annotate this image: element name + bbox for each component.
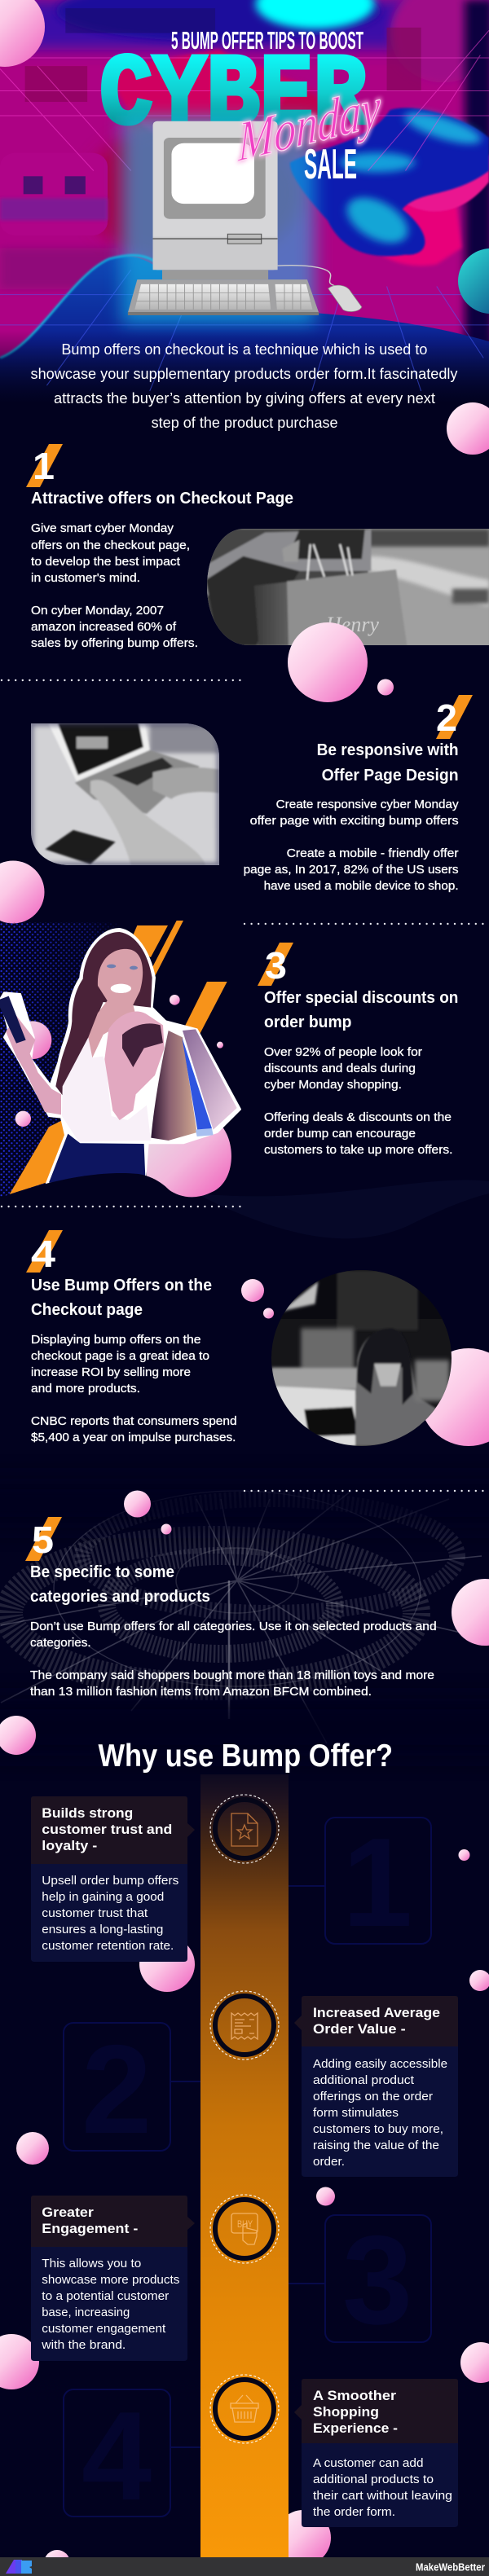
ghost number 2 xyxy=(64,2019,200,2160)
number badge 1 xyxy=(26,444,63,487)
raised arm xyxy=(104,1011,165,1120)
number badge 3: 3 xyxy=(265,944,287,987)
timeline icon 3: buy button: BUY xyxy=(237,2218,253,2230)
heading 3 xyxy=(264,989,458,1031)
body text 4: CNBC reports that consumers spend xyxy=(31,1415,237,1428)
body text 2: Create a mobile - friendly offer xyxy=(287,847,459,860)
card 3 header xyxy=(31,2196,187,2247)
body text 1: in customer's mind. xyxy=(31,572,140,585)
card 3: greater engagement: customer engagement xyxy=(42,2323,165,2336)
card 4: a smoother shopping experience: additional products to xyxy=(313,2473,434,2486)
skirt xyxy=(49,1134,145,1183)
card 3: greater engagement: with the brand. xyxy=(41,2339,126,2352)
card 1: builds strong customer trust and loyalty: help in gaining a good xyxy=(42,1891,164,1904)
body text 1: sales by offering bump offers. xyxy=(31,637,198,650)
card 4: a smoother shopping experience: A Smoother xyxy=(313,2388,396,2403)
card 1: builds strong customer trust and loyalty: ensures a long-lasting xyxy=(42,1923,163,1936)
heading 4 xyxy=(31,1277,212,1319)
body text 5 xyxy=(30,1620,437,1699)
card 3: greater engagement: to a potential customer xyxy=(42,2290,169,2303)
number badge 5: 5 xyxy=(32,1519,54,1561)
intro paragraph: Bump offers on checkout is a technique which is used to xyxy=(61,341,427,358)
card 2 body xyxy=(302,2046,458,2177)
body text 3: cyber Monday shopping. xyxy=(264,1079,402,1092)
body text 4: checkout page is a great idea to xyxy=(31,1350,209,1363)
hair xyxy=(55,932,152,1097)
body text 3: discounts and deals during xyxy=(264,1062,416,1075)
card 2: increased average order value: Adding easily accessible xyxy=(313,2058,447,2071)
dartboard background xyxy=(0,1479,489,1756)
body text 3: customers to take up more offers. xyxy=(264,1144,453,1157)
heading 2: Offer Page Design xyxy=(322,767,459,785)
bottom wave mask xyxy=(0,1173,175,1202)
card 4 body xyxy=(302,2443,458,2527)
intro paragraph: attracts the buyer’s attention by giving offers at every next xyxy=(54,389,435,407)
body text 4 xyxy=(31,1334,237,1444)
hero background xyxy=(0,0,489,433)
card 3: greater engagement: Greater xyxy=(42,2205,94,2220)
section 5: be specific to some categories and products xyxy=(0,1491,489,1755)
heading 1: Attractive offers on Checkout Page xyxy=(31,490,293,508)
computer illustration xyxy=(121,116,362,325)
body text 4: increase ROI by selling more xyxy=(31,1366,191,1379)
body text 4: $5,400 a year on impulse purchases. xyxy=(31,1431,236,1444)
heading 4: Checkout page xyxy=(31,1301,143,1319)
section 1: attractive offers on checkout page xyxy=(26,444,489,702)
card 3 body xyxy=(31,2247,187,2361)
computer screen xyxy=(164,138,266,219)
card 1 header xyxy=(31,1796,187,1864)
card 1: builds strong customer trust and loyalty: customer trust and xyxy=(42,1822,172,1837)
body text 1 xyxy=(31,522,198,650)
photo: shopping bags xyxy=(206,529,489,645)
card 4: a smoother shopping experience: the order form. xyxy=(313,2506,395,2519)
decorative circles xyxy=(288,622,368,702)
number badge 4 xyxy=(26,1230,63,1275)
orange stripes xyxy=(128,925,168,957)
card 1: builds strong customer trust and loyalty: customer retention rate. xyxy=(42,1940,174,1953)
section 3: offer special discounts on order bump xyxy=(258,943,458,1157)
heading 2 xyxy=(317,741,459,785)
ghost number 3 xyxy=(289,2209,431,2350)
body text 3: order bump can encourage xyxy=(264,1128,416,1141)
intro paragraph: showcase your supplementary products order form.It fascinatedly xyxy=(31,365,458,382)
body text 3: Over 92% of people look for xyxy=(264,1046,422,1059)
decorative circles in hero xyxy=(0,0,489,455)
card 2: increased average order value: Increased Average xyxy=(313,2005,440,2020)
ghost number 4 xyxy=(64,2385,200,2526)
card 2: increased average order value: offerings on the order xyxy=(313,2090,433,2103)
card 1: builds strong customer trust and loyalty: customer trust that xyxy=(42,1907,148,1920)
photo: shopping bags: Henry xyxy=(325,613,379,636)
section 2: be responsive with offer page design xyxy=(0,695,473,924)
card 3: greater engagement: This allows you to xyxy=(42,2257,141,2270)
card 3: greater engagement: showcase more products xyxy=(42,2274,179,2287)
hero word: CYBER: CYBER xyxy=(99,40,368,154)
card 1: builds strong customer trust and loyalty xyxy=(31,1796,195,1962)
computer body xyxy=(153,121,278,270)
card 2: increased average order value: customers to buy more, xyxy=(313,2123,443,2136)
card 1: builds strong customer trust and loyalty: Builds strong xyxy=(42,1805,133,1821)
number badge 4: 4 xyxy=(31,1233,55,1275)
body text 5: Don’t use Bump offers for all categories. Use it on selected products and xyxy=(30,1620,437,1633)
decorative circles xyxy=(124,1491,151,1517)
body text 3 xyxy=(264,1046,453,1157)
hero word: Monday: Monday xyxy=(237,74,381,174)
footer bar xyxy=(0,2557,489,2576)
heading: why use bump offer: Why use Bump Offer? xyxy=(98,1739,393,1774)
body text 1: to develop the best impact xyxy=(31,556,180,569)
card 2: increased average order value: order. xyxy=(313,2156,345,2169)
ghost number 1 xyxy=(289,1812,431,1953)
arm with phone xyxy=(6,1016,61,1114)
card 3: greater engagement: Engagement - xyxy=(42,2221,138,2236)
number badge 5 xyxy=(25,1517,62,1561)
body text 1: offers on the checkout page, xyxy=(31,539,190,552)
body text 2: have used a mobile device to shop. xyxy=(264,880,459,893)
heading 5: Be specific to some xyxy=(30,1563,174,1581)
heading 5: categories and products xyxy=(30,1588,210,1606)
body text 1: Give smart cyber Monday xyxy=(31,522,174,535)
body text 1: On cyber Monday, 2007 xyxy=(31,604,164,618)
body text 5: than 13 million fashion items from Amazon BFCM combined. xyxy=(30,1686,372,1699)
card 3: greater engagement: base, increasing xyxy=(42,2306,130,2319)
ghost number 2: 2 xyxy=(82,2019,152,2160)
mouse and cable xyxy=(278,266,337,287)
hero grid lines xyxy=(0,30,489,171)
pink circles xyxy=(14,1021,51,1059)
card 4 header xyxy=(302,2379,458,2443)
timeline icon 1: document with star xyxy=(210,1795,279,1863)
timeline icon 2: receipt xyxy=(210,1991,279,2059)
card 2 header xyxy=(302,1996,458,2046)
heading 3: Offer special discounts on xyxy=(264,989,458,1007)
card 4: a smoother shopping experience: their cart without leaving xyxy=(313,2490,452,2503)
number badge 3 xyxy=(258,943,293,987)
body text 2: Create responsive cyber Monday xyxy=(276,798,459,811)
heading 2: Be responsive with xyxy=(317,741,459,759)
number badge 2 xyxy=(436,695,473,739)
decorative circle xyxy=(0,860,44,924)
footer logo xyxy=(6,2560,32,2574)
card 2: increased average order value xyxy=(294,1996,458,2177)
card 1 body xyxy=(31,1864,187,1962)
intro paragraph: step of the product purchase xyxy=(152,414,338,431)
bags xyxy=(151,1031,197,1141)
card 2: increased average order value: form stimulates xyxy=(313,2107,399,2120)
timeline icon 4: shopping basket xyxy=(210,2375,279,2443)
card 3: greater engagement xyxy=(31,2196,195,2361)
timeline icon 3: buy button xyxy=(210,2195,279,2263)
face and neck xyxy=(88,949,143,1057)
ghost number 3: 3 xyxy=(342,2209,412,2350)
faint background wave xyxy=(196,1180,489,1238)
floppy slot xyxy=(227,234,262,244)
body text 1: amazon increased 60% of xyxy=(31,621,177,634)
decorative circles xyxy=(420,1348,489,1446)
number badge 1: 1 xyxy=(33,445,55,487)
card 4: a smoother shopping experience: A customer can add xyxy=(313,2457,424,2470)
orange timeline column xyxy=(200,1774,289,2557)
intro paragraph xyxy=(31,341,458,431)
body text 5: The company said shoppers bought more than 18 million toys and more xyxy=(30,1669,434,1682)
body text 2: offer page with exciting bump offers xyxy=(250,815,459,828)
top xyxy=(62,1037,151,1142)
heading 4: Use Bump Offers on the xyxy=(31,1277,212,1295)
photo: woman at laptop xyxy=(271,1270,452,1446)
card 4: a smoother shopping experience: Experience - xyxy=(313,2420,398,2436)
dot pattern xyxy=(0,922,122,1199)
card 4: a smoother shopping experience: Shopping xyxy=(313,2404,379,2420)
body text 4: and more products. xyxy=(31,1383,140,1396)
ghost number 1: 1 xyxy=(342,1812,412,1953)
woman with shopping bags illustration xyxy=(0,921,240,1202)
card 4: a smoother shopping experience xyxy=(294,2379,458,2527)
ghost number 4: 4 xyxy=(82,2385,152,2526)
section 4: use bump offers on the checkout page xyxy=(26,1230,489,1446)
infographic canvas: SALE xyxy=(304,141,357,188)
card 2: increased average order value: additional product xyxy=(313,2074,414,2087)
body text 3: Offering deals & discounts on the xyxy=(264,1111,452,1124)
card 1: builds strong customer trust and loyalty: loyalty - xyxy=(42,1838,97,1853)
card 2: increased average order value: raising the value of the xyxy=(313,2139,439,2152)
body text 4: Displaying bump offers on the xyxy=(31,1334,201,1347)
card 2: increased average order value: Order Value - xyxy=(313,2021,406,2037)
keyboard xyxy=(128,279,319,313)
body text 2 xyxy=(244,798,459,893)
why section decorations xyxy=(0,1849,489,2576)
photo: laptop on desk xyxy=(31,723,219,866)
heading 3: order bump xyxy=(264,1013,352,1031)
silhouette outline xyxy=(0,929,240,1184)
number badge 2: 2 xyxy=(436,697,457,739)
body text 5: categories. xyxy=(30,1637,91,1650)
body text 2: page as, In 2017, 82% of the US users xyxy=(244,864,459,877)
heading 5 xyxy=(30,1563,210,1606)
phone xyxy=(0,996,26,1044)
card 1: builds strong customer trust and loyalty: Upsell order bump offers xyxy=(42,1875,178,1888)
